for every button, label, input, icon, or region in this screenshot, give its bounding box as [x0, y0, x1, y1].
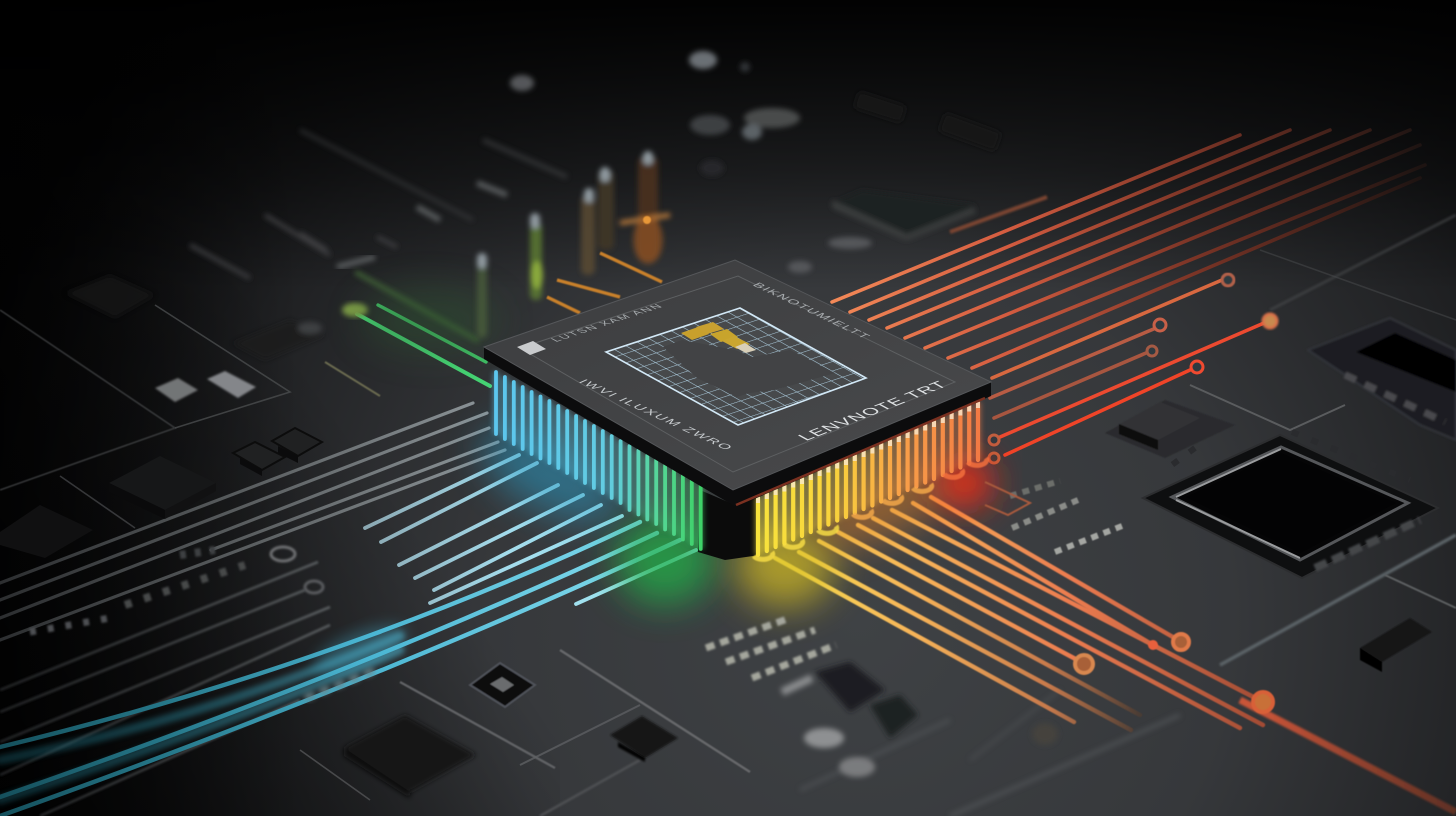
bright blue short traces [365, 455, 696, 604]
blue glow on far trace [307, 615, 413, 685]
right pins [758, 402, 978, 555]
green capacitor bright spot [531, 261, 543, 289]
dark chip large [109, 456, 216, 519]
blurred metal parts top centre [510, 51, 800, 176]
top contacts [1165, 432, 1410, 480]
grid frame [606, 308, 866, 425]
orange bright dot [643, 216, 651, 224]
grid centre opening [663, 340, 835, 397]
orange glow beneath right pins [804, 447, 966, 563]
chip label bottom right: LENVNOTE TRT [794, 379, 952, 443]
SMD cluster beside chip [985, 481, 1122, 552]
blue glow behind left pins [467, 409, 633, 541]
pad traces [838, 497, 1263, 728]
green glow behind left pins [615, 515, 715, 605]
module contacts [1345, 375, 1445, 422]
terminal pads on orange traces [1075, 634, 1273, 712]
amber strip traces [547, 253, 662, 313]
big processor lower right [1143, 432, 1438, 578]
thin yellow lead [325, 362, 380, 396]
small socket [470, 663, 535, 707]
chip label top right: BIKNOTUMIELTT [750, 281, 874, 340]
capacitor caps [482, 156, 648, 264]
grey-blue long traces [0, 403, 505, 640]
green traces upper left [342, 273, 500, 386]
chip red edge reflection [736, 398, 985, 505]
processor dark window [1186, 453, 1396, 553]
orange pad glow [633, 216, 663, 264]
left pins [496, 372, 701, 549]
capacitor amber pair [598, 170, 614, 250]
bottom components [305, 618, 1432, 798]
long blue traces soft underlay [0, 636, 400, 800]
inner outline [520, 276, 955, 472]
blue traces lower left [0, 403, 696, 816]
chip underside shadow [698, 490, 760, 560]
dark chip left [0, 505, 93, 558]
chip body side [484, 347, 991, 507]
red traces upper right [832, 130, 1425, 455]
paired small parts [233, 428, 322, 476]
chip label top left: LUTSN XAM ANN [549, 302, 666, 343]
module housing [1308, 318, 1456, 440]
fading far traces [775, 541, 1140, 730]
capacitor green [530, 222, 542, 300]
orange lead [620, 215, 670, 223]
blurred blue-green pin glow [496, 372, 701, 549]
block lower right [1360, 618, 1432, 672]
gold cells [681, 322, 756, 353]
blurred lower-left parts [305, 670, 375, 698]
SMD cluster centre [706, 618, 836, 678]
small dark block [610, 716, 678, 762]
chip label bottom left: IWVI ILUXUM ZWRO [576, 378, 737, 452]
capacitor green left [477, 258, 487, 338]
blurred components top right [788, 91, 1002, 273]
chip [484, 260, 991, 555]
contact pads [1315, 520, 1420, 568]
orange traces lower right [775, 497, 1263, 730]
fading extension trace [1240, 700, 1456, 812]
processor frame [1143, 435, 1438, 578]
small solder parts left [30, 547, 323, 632]
module window [1356, 333, 1456, 392]
dim grey traces lower left [0, 562, 330, 816]
blurred yellow-orange pin glow [758, 402, 978, 555]
socket module right edge [1308, 318, 1456, 440]
red glow at chip corner [939, 459, 991, 507]
bezel bright edges [1176, 449, 1300, 558]
pin foot pads [754, 458, 987, 559]
pin top highlights [758, 402, 978, 503]
large dark chip [344, 715, 476, 798]
blurred upper left parts [65, 275, 325, 360]
raised component near red traces [1105, 400, 1235, 458]
processor bezel [1172, 447, 1408, 560]
long fading blue traces [0, 522, 680, 816]
terminal pads on red traces [989, 274, 1277, 463]
light capacitors [155, 371, 256, 402]
capacitor orange [638, 156, 658, 260]
chip top face [484, 260, 991, 490]
left side components [0, 275, 380, 632]
pin-one marker [517, 341, 546, 355]
SMD cluster lower [782, 662, 1058, 777]
yellow glow beneath right pins [735, 523, 835, 607]
vertical glowing capacitors behind chip [477, 156, 670, 338]
capacitor amber [581, 195, 595, 275]
